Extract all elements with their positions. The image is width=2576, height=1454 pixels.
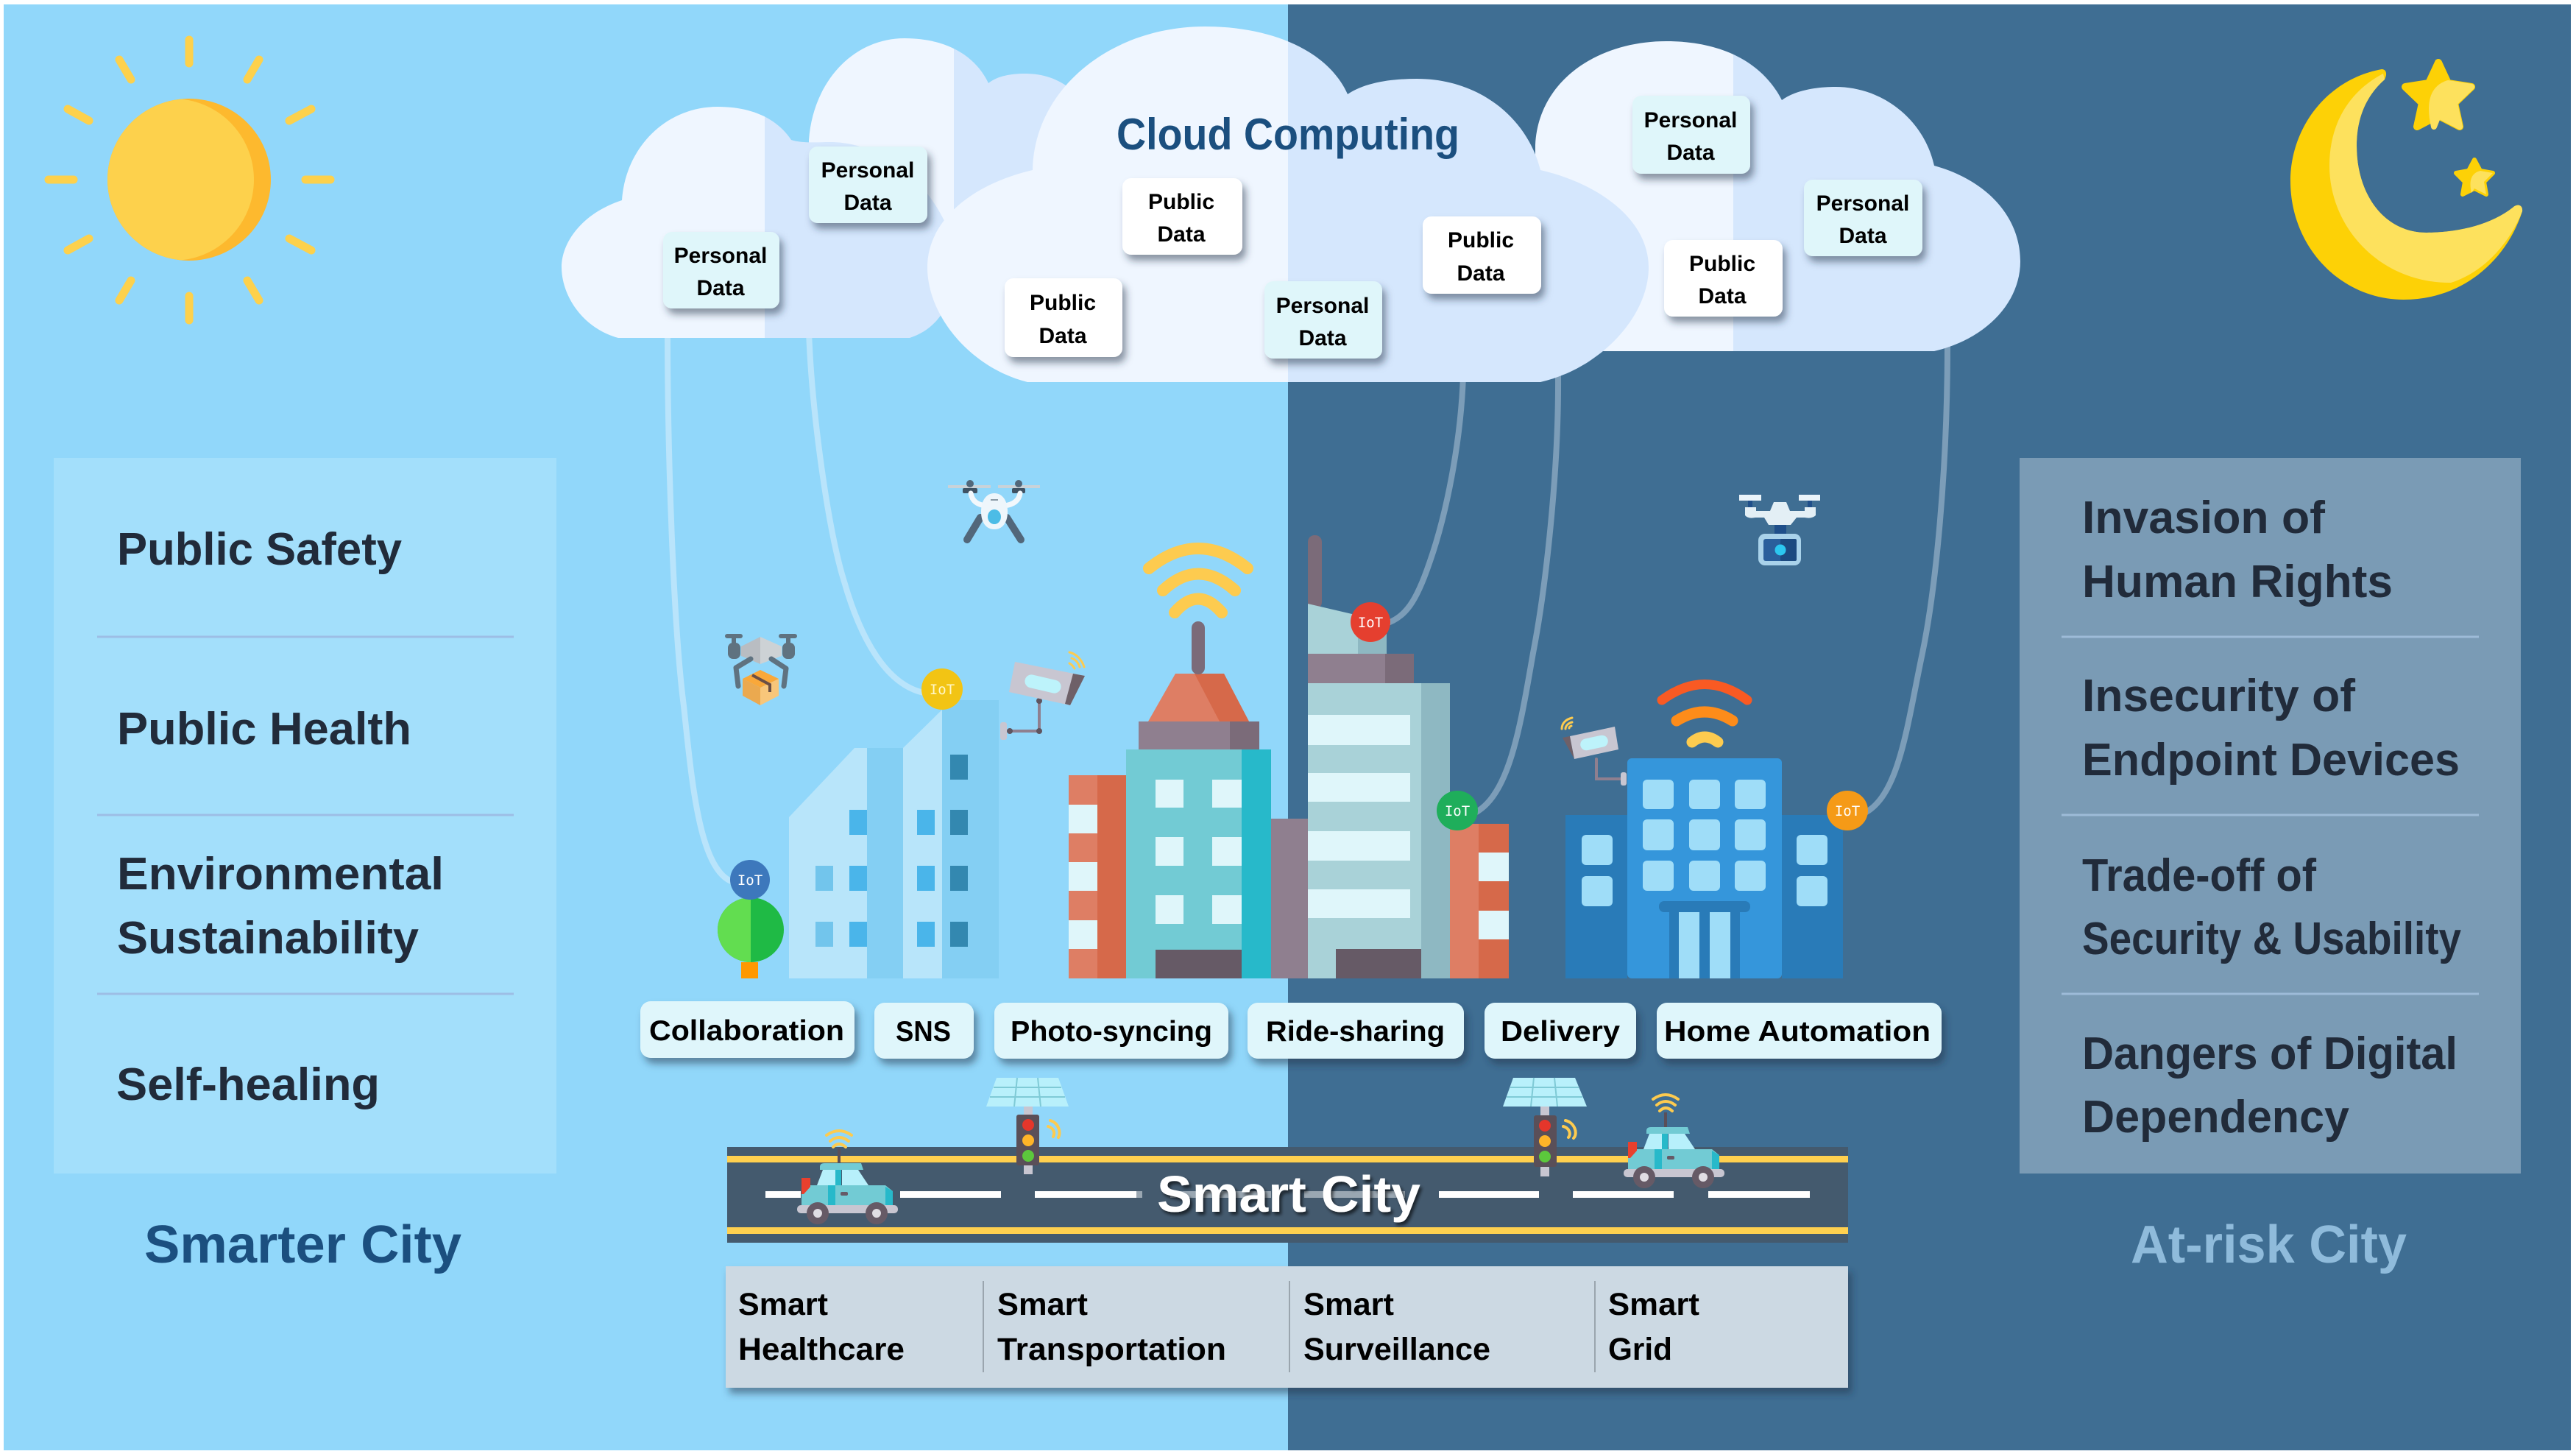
text: Trade-off of Security and Usability (2082, 850, 2461, 964)
card: Public Data 4 (1664, 240, 1783, 317)
card: Personal Data 1 (663, 232, 779, 308)
text: Insecurity of Endpoint Devices: Endpoint Devices (2082, 735, 2460, 786)
card: Public Data 1: Public (1148, 190, 1214, 214)
text: Smart Healthcare (738, 1287, 905, 1367)
text: Smart Healthcare: Healthcare (738, 1332, 905, 1367)
IoT node blue (730, 860, 770, 900)
text: Invasion of Human Rights (2082, 493, 2393, 607)
building: light blue twin block (789, 700, 999, 978)
pill: Photo-syncing (994, 1003, 1228, 1059)
text: Smart Surveillance: Smart (1303, 1287, 1394, 1322)
panel: smart services (726, 1266, 1848, 1388)
icon: delivery drone with box (727, 636, 795, 705)
panel: Smarter City benefits (54, 458, 556, 1174)
building: teal tower with wifi antenna (1126, 548, 1271, 978)
text: Insecurity of Endpoint Devices: Insecurity of (2082, 671, 2355, 721)
card: Public Data 3: Public (1448, 228, 1514, 253)
IoT node red: IoT (1358, 615, 1383, 631)
text: Smart Transportation (997, 1287, 1226, 1367)
card: Personal Data 2 (809, 147, 927, 223)
cloud: lower left (562, 107, 955, 338)
IoT node blue: IoT (737, 872, 762, 889)
card: Personal Data 4: Data (1666, 141, 1715, 165)
building: red block (1069, 775, 1126, 978)
text: Smart Grid: Grid (1608, 1332, 1672, 1367)
text: Invasion of Human Rights: Human Rights (2082, 557, 2393, 607)
card: Personal Data 2: Personal (821, 158, 914, 183)
icon: white drone (948, 480, 1040, 540)
pill: SNS (874, 1003, 974, 1059)
icon: CCTV camera left (1000, 652, 1085, 740)
text: Dangers of Digital Dependency (2082, 1028, 2458, 1143)
traffic light with solar panel right (1503, 1078, 1587, 1176)
IoT node orange: IoT (1835, 803, 1860, 819)
card: Personal Data 1: Personal (674, 244, 767, 268)
text: Smart Transportation: Smart (997, 1287, 1088, 1322)
IoT node yellow: IoT (930, 682, 955, 698)
heading: Smarter City: Smarter City (144, 1215, 461, 1274)
building: blue office (1565, 685, 1843, 978)
IoT node red (1351, 602, 1390, 642)
card: Public Data 3 (1423, 216, 1541, 294)
icon: sun (49, 40, 330, 320)
text: Environmental Sustainability: Environmental (117, 849, 444, 900)
cloud: upper left (809, 38, 1075, 294)
car left (797, 1131, 898, 1224)
card: Personal Data 3 (1264, 281, 1382, 359)
pill: Photo-syncing: Photo-syncing (1011, 1016, 1212, 1048)
IoT node green (1437, 791, 1478, 830)
traffic light with solar panel left (986, 1078, 1069, 1174)
pill: Ride-sharing (1248, 1003, 1464, 1059)
text: Environmental Sustainability (117, 849, 444, 964)
text: Environmental Sustainability: Sustainability (117, 913, 420, 964)
card: Personal Data 3: Personal (1276, 294, 1369, 318)
card: Public Data 2: Data (1038, 324, 1087, 348)
card: Personal Data 4 (1632, 96, 1750, 174)
text: Dangers of Digital Dependency: Dependency (2082, 1092, 2350, 1143)
pill: Delivery: Delivery (1501, 1016, 1620, 1048)
text: Public Health: Public Health (117, 704, 411, 755)
building: pale tower (1308, 535, 1450, 978)
text: Smart Transportation: Transportation (997, 1332, 1226, 1367)
card: Public Data 2: Public (1030, 291, 1096, 315)
pill: Delivery (1485, 1003, 1636, 1059)
IoT node green: IoT (1445, 803, 1470, 819)
pill: Collaboration (640, 1001, 854, 1058)
card: Personal Data 5 (1804, 180, 1922, 256)
pill: Home Automation: Home Automation (1664, 1016, 1931, 1048)
card: Public Data 4: Data (1698, 284, 1747, 308)
card: Personal Data 1: Data (696, 276, 745, 300)
cloud: right (1535, 41, 2020, 351)
text: Insecurity of Endpoint Devices (2082, 671, 2460, 786)
IoT node orange (1827, 791, 1868, 830)
card: Public Data 4: Public (1689, 252, 1755, 276)
text: Smart Grid (1608, 1287, 1699, 1367)
cloud: center (927, 27, 1649, 382)
car right (1624, 1095, 1724, 1188)
IoT node yellow (921, 668, 963, 710)
card: Personal Data 2: Data (843, 191, 892, 215)
icon: crescent moon and stars (2290, 63, 2522, 300)
heading: Smart City: Smart City (1157, 1165, 1420, 1223)
panel: daytime background (4, 4, 1288, 1450)
connection wires from clouds to IoT nodes (668, 331, 1947, 883)
building: small red block (1450, 824, 1509, 978)
text: Trade-off of Security and Usability: Security & Usability (2082, 914, 2461, 964)
text: Smart Healthcare: Smart (738, 1287, 828, 1322)
text: Smart Surveillance (1303, 1287, 1490, 1367)
road (727, 1147, 1848, 1243)
icon: camera drone (1739, 495, 1820, 565)
card: Personal Data 5: Data (1839, 224, 1887, 248)
icon: CCTV camera right (1562, 718, 1627, 786)
heading: At-risk City: At-risk City (2131, 1215, 2407, 1274)
text: Invasion of Human Rights: Invasion of (2082, 493, 2325, 543)
building: grey side block (1271, 819, 1308, 978)
card: Public Data 1: Data (1157, 222, 1206, 247)
pill: SNS: SNS (896, 1016, 951, 1048)
text: Trade-off of Security and Usability: Trade-off of (2082, 850, 2316, 901)
text: Dangers of Digital Dependency: Dangers of Digital (2082, 1028, 2458, 1079)
text: Smart Grid: Smart (1608, 1287, 1699, 1322)
pill: Collaboration: Collaboration (649, 1015, 844, 1047)
card: Personal Data 4: Personal (1644, 108, 1737, 133)
pill: Home Automation (1657, 1003, 1942, 1059)
text: Smart Surveillance: Surveillance (1303, 1332, 1490, 1367)
card: Personal Data 3: Data (1298, 326, 1347, 350)
pill: Ride-sharing: Ride-sharing (1266, 1016, 1445, 1048)
card: Personal Data 5: Personal (1816, 191, 1909, 216)
text: Public Safety: Public Safety (117, 524, 403, 575)
panel: night background (1288, 4, 2571, 1450)
panel: At-risk City risks (2020, 458, 2521, 1174)
heading: Cloud Computing: Cloud Computing (1117, 110, 1459, 159)
card: Public Data 3: Data (1457, 261, 1505, 286)
card: Public Data 1 (1122, 178, 1242, 255)
text: Self-healing: Self-healing (116, 1059, 380, 1110)
tree (718, 897, 784, 978)
card: Public Data 2 (1005, 278, 1122, 357)
